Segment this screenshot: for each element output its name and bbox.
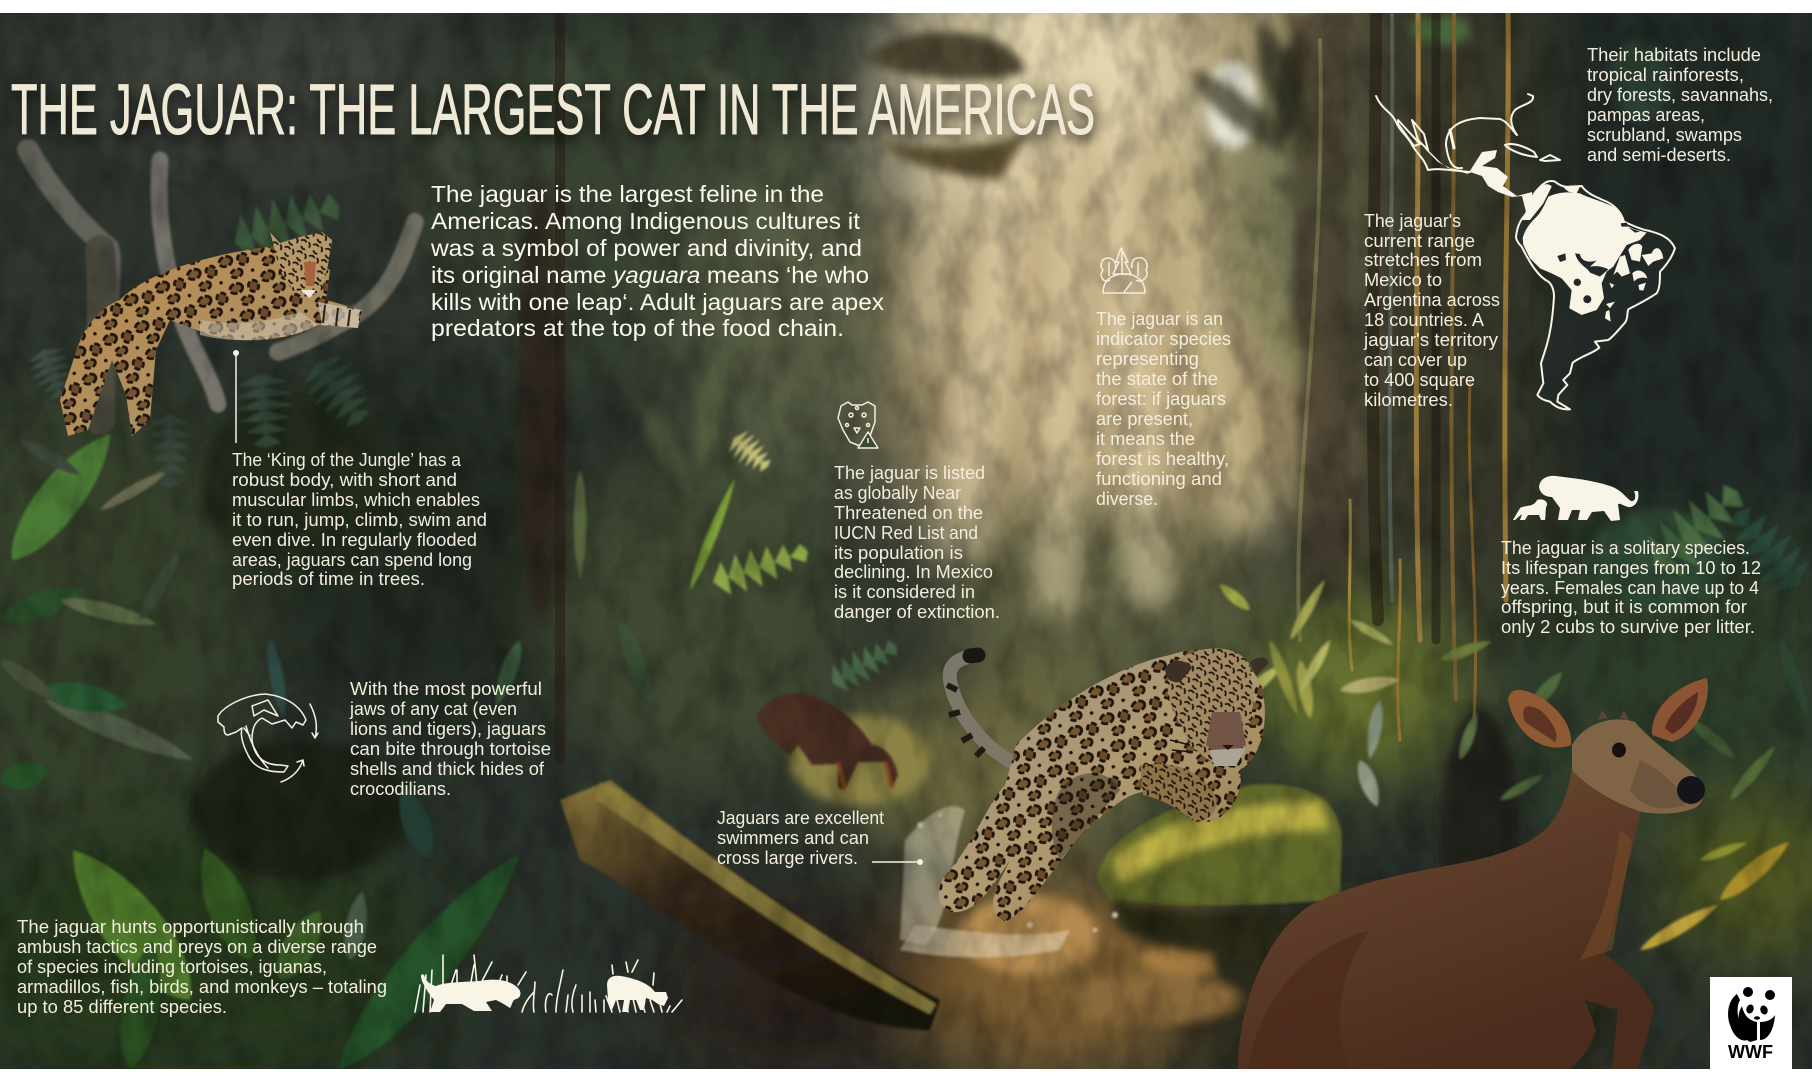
logo: WWF panda: WWF [1728, 1042, 1773, 1062]
map outline: South America [1516, 181, 1675, 409]
text: conservation status [834, 463, 1000, 622]
text: current range [1363, 211, 1500, 410]
light rays [900, 0, 1270, 620]
mossy rock [1097, 784, 1360, 958]
intro text block [430, 181, 885, 341]
intro text block: The jaguar is the largest feline in the [431, 181, 824, 207]
text: habitats: tropical rainforests, [1587, 65, 1744, 85]
text: indicator species: are present, [1096, 409, 1193, 429]
text: current range: can cover up [1364, 350, 1467, 370]
text: conservation status: as globally Near [834, 483, 961, 503]
text: indicator species: functioning and [1096, 469, 1222, 489]
text: current range: The jaguar's [1364, 211, 1461, 231]
text: conservation status: IUCN Red List and [834, 523, 978, 543]
intro text block: Americas. Among Indigenous cultures it [431, 208, 861, 234]
text: current range: to 400 square [1364, 370, 1475, 390]
text: conservation status: Threatened on the [834, 503, 983, 523]
peccary [757, 693, 898, 790]
text: powerful jaws: can bite through tortoise [350, 739, 551, 759]
water splash [900, 806, 1118, 958]
icon: jaguar head with warning triangle [838, 402, 878, 448]
text: habitats: and semi-deserts. [1587, 145, 1731, 165]
text: conservation status: is it considered in [834, 582, 975, 602]
text: conservation status: its population is [834, 543, 963, 563]
text: powerful jaws: With the most powerful [350, 679, 542, 699]
map outline: Mexico, Central America and Caribbean [1376, 94, 1560, 172]
text: current range: Mexico to [1364, 270, 1442, 290]
icon: jaguar skull with biting arrows [218, 694, 318, 782]
text: habitats: dry forests, savannahs, [1587, 85, 1773, 105]
text: conservation status: danger of extinction. [834, 602, 1000, 622]
text: powerful jaws: shells and thick hides of [350, 759, 545, 779]
text: indicator species [1096, 309, 1231, 509]
dark canopy clusters [1184, 64, 1290, 156]
text: hunting: of species including tortoises, iguanas, [17, 957, 327, 977]
text: king of the jungle: robust body, with short and [232, 470, 457, 490]
intro text block: predators at the top of the food chain. [431, 315, 844, 341]
intro text block: its original name yaguara means ‘he who [431, 262, 869, 288]
text: indicator species: forest is healthy, [1096, 449, 1229, 469]
text: habitats [1587, 45, 1773, 165]
jaguar leaping [939, 648, 1268, 922]
text: solitary species: Its lifespan ranges from 10 to 12 [1501, 558, 1761, 578]
text: conservation status: The jaguar is listed [834, 463, 985, 483]
tree trunks and branches at upper left [28, 150, 415, 420]
intro text block: kills with one leap‘. Adult jaguars are apex [431, 289, 885, 315]
text: indicator species: indicator species [1096, 329, 1231, 349]
text: king of the jungle: it to run, jump, climb, swim and [232, 510, 487, 530]
text: solitary species: The jaguar is a solitary species. [1501, 538, 1750, 558]
icon: prey silhouettes in grass [415, 955, 682, 1012]
text: hunting: ambush tactics and preys on a diverse range [17, 937, 377, 957]
text: current range: jaguar's territory [1363, 330, 1498, 350]
intro text block: was a symbol of power and divinity, and [430, 235, 862, 261]
text: hunting: The jaguar hunts opportunistically through [17, 917, 364, 937]
text: king of the jungle [232, 450, 487, 589]
text: king of the jungle: muscular limbs, which enables [232, 490, 480, 510]
text: king of the jungle: even dive. In regularly flooded [232, 530, 477, 550]
text: habitats: scrubland, swamps [1587, 125, 1742, 145]
leader line: swimmers [872, 860, 922, 864]
text: king of the jungle: The ‘King of the Jungle’ has a [232, 450, 462, 470]
text: hunting: armadillos, fish, birds, and monkeys – totaling [17, 977, 387, 997]
hanging vines [560, 13, 1508, 760]
fallen log [560, 780, 940, 1030]
text: indicator species: The jaguar is an [1096, 309, 1223, 329]
text: powerful jaws: crocodilians. [350, 779, 451, 799]
text: indicator species: forest: if jaguars [1096, 389, 1226, 409]
text: powerful jaws: lions and tigers), jaguars [350, 719, 546, 739]
text: indicator species: diverse. [1096, 489, 1158, 509]
text: excellent swimmers: swimmers and can [717, 828, 869, 848]
text: powerful jaws [349, 679, 551, 799]
text: solitary species [1501, 538, 1761, 637]
jaguar resting on branch [60, 232, 362, 436]
text: solitary species: only 2 cubs to survive per litter. [1501, 617, 1755, 637]
red brocket deer [1238, 678, 1708, 1069]
text: current range: kilometres. [1364, 390, 1453, 410]
text: current range: Argentina across [1364, 290, 1500, 310]
icon: forest with gauge [1101, 248, 1147, 293]
text: powerful jaws: jaws of any cat (even [349, 699, 517, 719]
text: current range: stretches from [1364, 250, 1482, 270]
text: excellent swimmers: cross large rivers. [717, 848, 858, 868]
text: hunting: up to 85 different species. [17, 997, 227, 1017]
text: habitats: pampas areas, [1587, 105, 1705, 125]
icon: jaguar with cub [1513, 476, 1638, 521]
text: excellent swimmers: Jaguars are excellent [717, 808, 884, 828]
leader line: king of the jungle [234, 350, 238, 443]
text: solitary species: years. Females can have up to 4 [1501, 578, 1759, 598]
text: conservation status: declining. In Mexico [834, 562, 993, 582]
text: hunting [17, 917, 387, 1017]
text: indicator species: representing [1096, 349, 1199, 369]
jaguar head [1165, 648, 1268, 766]
text: indicator species: it means the [1096, 429, 1195, 449]
text: indicator species: the state of the [1096, 369, 1218, 389]
text: king of the jungle: periods of time in trees. [232, 569, 425, 589]
title: THE JAGUAR: THE LARGEST CAT IN THE AMERICAS [11, 71, 1095, 150]
text: king of the jungle: areas, jaguars can spend long [232, 550, 472, 570]
text: solitary species: offspring, but it is common for [1501, 597, 1747, 617]
logo: WWF panda [1710, 977, 1792, 1069]
map: jaguar range in the Americas [1376, 94, 1675, 409]
text: current range: 18 countries. A [1364, 310, 1484, 330]
text: current range: current range [1364, 231, 1475, 251]
map fill: current jaguar range [1522, 184, 1663, 322]
text: habitats: Their habitats include [1587, 45, 1761, 65]
text: excellent swimmers [717, 808, 884, 868]
